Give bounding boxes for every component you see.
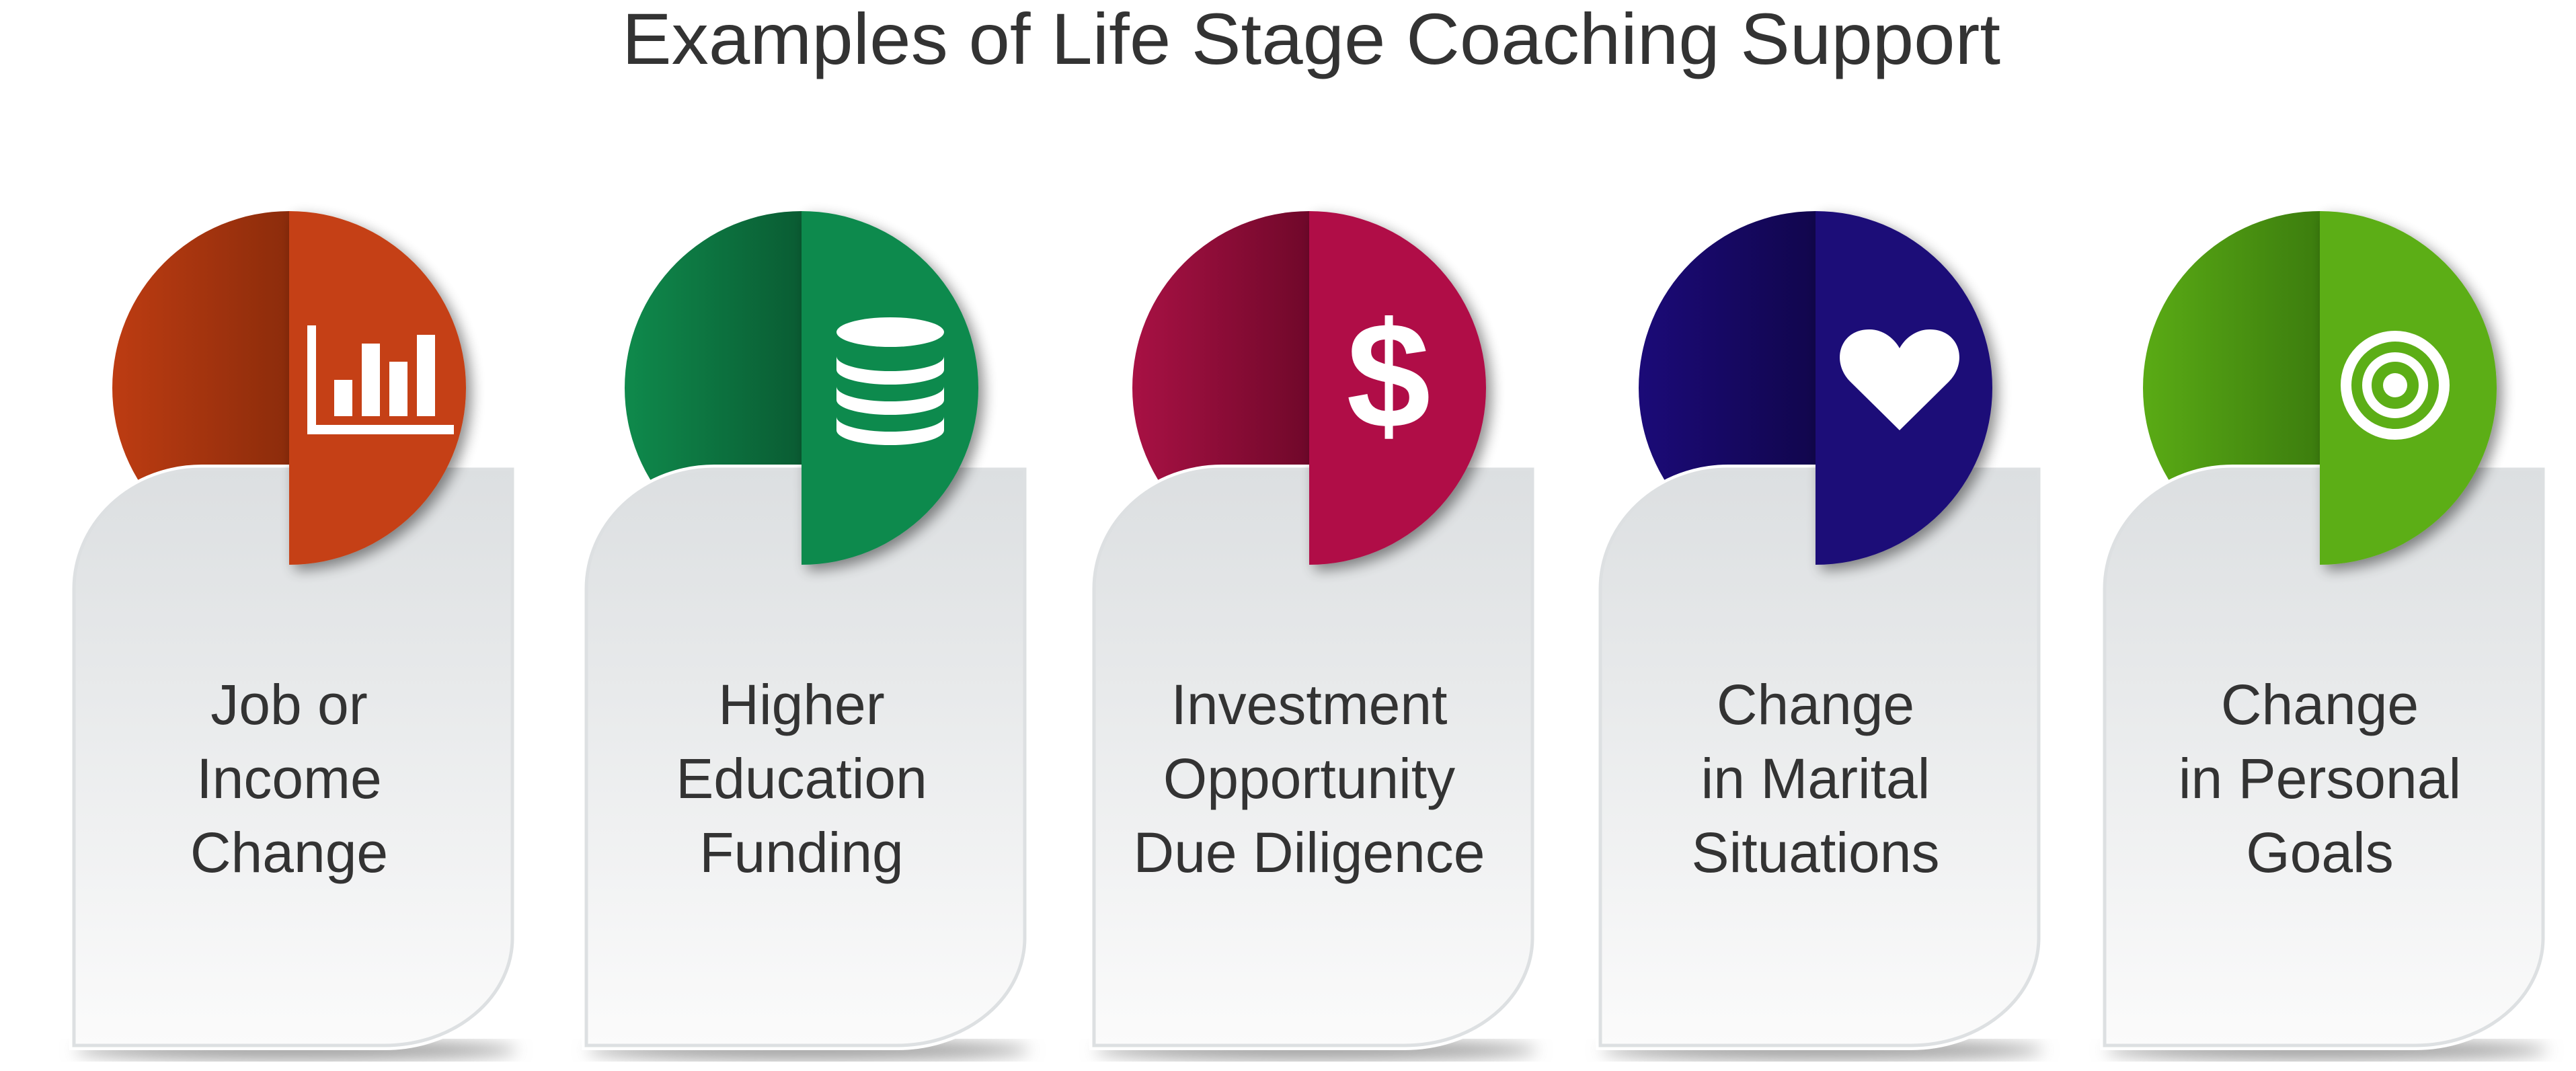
icon: coin stack	[836, 317, 944, 445]
text: label: Situations	[1692, 821, 1939, 884]
text: label: Job or	[210, 673, 368, 736]
icon: dollar: $	[1346, 290, 1431, 460]
text: label: Education	[676, 747, 927, 810]
panel: Change in Personal Goals	[2105, 211, 2548, 1060]
icon: heart	[1840, 329, 1959, 430]
text: label: Higher	[718, 673, 885, 736]
text: label: Change	[2221, 673, 2419, 736]
text: label: Income	[196, 747, 382, 810]
text: label: in Marital	[1701, 747, 1930, 810]
panel: Change in Marital Situations	[1600, 211, 2044, 1060]
text: label: Goals	[2246, 821, 2394, 884]
text: label: in Personal	[2179, 747, 2461, 810]
text: label: Opportunity	[1163, 747, 1455, 810]
panel: Job or Income Change	[74, 211, 518, 1060]
panel: Higher Education Funding	[586, 211, 1030, 1060]
text: label: Investment	[1171, 673, 1447, 736]
title: Examples of Life Stage Coaching Support	[622, 0, 2000, 79]
text: label: Funding	[699, 821, 904, 884]
text: label: Change	[1717, 673, 1914, 736]
text: label: Due Diligence	[1134, 821, 1485, 884]
panel: Investment Opportunity Due Diligence	[1094, 211, 1538, 1060]
text: label: Change	[190, 821, 388, 884]
icon: target	[2346, 336, 2444, 434]
icon: bar chart	[307, 325, 454, 434]
